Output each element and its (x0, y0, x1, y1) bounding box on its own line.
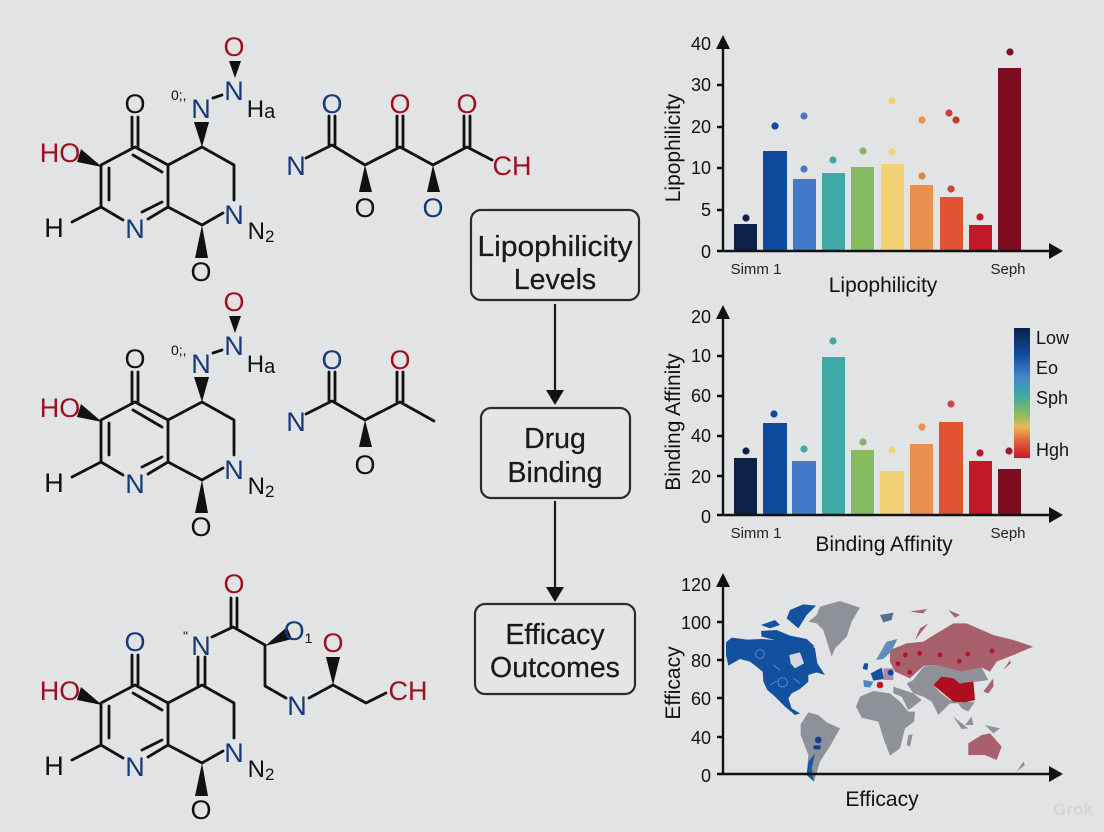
axis title: x: Efficacy (845, 788, 919, 811)
side chain: O (321, 345, 343, 375)
world map (726, 601, 1033, 782)
axes: 60 (691, 689, 711, 709)
axes: 10 (691, 346, 711, 366)
ring system: O (190, 257, 212, 287)
south america (801, 712, 840, 782)
side chain: N (286, 407, 306, 437)
europe (863, 639, 897, 688)
axes: 5 (701, 200, 711, 220)
axes: 0 (701, 507, 711, 527)
flow box: Drug Binding: Binding (507, 457, 603, 489)
side chain: O (322, 628, 344, 658)
axes: 40 (691, 426, 711, 446)
ring system: 0;, (171, 87, 187, 103)
north america (726, 604, 825, 715)
axis title: y: Lipophilicity (662, 93, 685, 202)
legend: colour scale: Hgh (1036, 440, 1069, 460)
axes: 40 (691, 728, 711, 748)
side chain: CH (388, 676, 428, 706)
molecule 1 (40, 32, 532, 287)
side chain: N (191, 631, 211, 661)
islands (880, 609, 1025, 772)
side chain: O (389, 345, 411, 375)
bar chart: lipophilicity (662, 34, 1063, 297)
axes (691, 305, 1063, 527)
arabia (893, 687, 922, 710)
side chain: N (287, 691, 307, 721)
ring system: O (124, 89, 146, 119)
axes: 20 (691, 307, 711, 327)
axes: 0 (701, 242, 711, 262)
russia (890, 623, 1033, 678)
data points (742, 337, 1013, 457)
ring system: 2 (265, 482, 274, 501)
side chain: O (284, 616, 305, 646)
ring system: 2 (265, 227, 274, 246)
side chain (286, 345, 434, 480)
ring system: H (44, 751, 64, 781)
side chain: " (183, 628, 188, 644)
flow box: Efficacy Outcomes (475, 604, 635, 694)
axis title: x: Lipophilicity (829, 274, 938, 297)
arrow: levels to binding (546, 304, 564, 405)
molecule 2 (40, 287, 434, 542)
ring system: H (44, 468, 64, 498)
axis title: y: Binding Affinity (662, 353, 685, 491)
flow box: Efficacy Outcomes: Efficacy (505, 619, 605, 651)
ring system: N (191, 94, 211, 124)
axes (691, 34, 1063, 262)
ring system: N (125, 752, 145, 782)
flow box: Efficacy Outcomes: Outcomes (490, 652, 620, 684)
flow box: Drug Binding: Drug (524, 423, 586, 455)
axes (681, 573, 1063, 786)
bar chart: binding affinity (662, 305, 1070, 556)
ring system: O (223, 287, 245, 317)
ring system: O (190, 795, 212, 825)
ring system (40, 287, 276, 542)
ring system: N (125, 214, 145, 244)
axes: 40 (691, 34, 711, 54)
ring system: H (44, 213, 64, 243)
china (933, 677, 975, 702)
axes: 10 (691, 158, 711, 178)
side chain: O (321, 89, 343, 119)
legend: colour scale (1014, 328, 1070, 460)
arrow: binding to efficacy (546, 501, 564, 602)
ring system: N (224, 455, 244, 485)
flow box: Lipophilicity Levels: Lipophilicity (478, 231, 633, 263)
bars (734, 68, 1021, 251)
ring system: 0;, (171, 342, 187, 358)
category labels (731, 525, 1026, 542)
axes: 20 (691, 467, 711, 487)
axes: 20 (691, 117, 711, 137)
legend: colour scale: Sph (1036, 388, 1068, 408)
ring system: O (223, 32, 245, 62)
side chain: O (354, 450, 376, 480)
ring system: N (125, 469, 145, 499)
legend: colour scale: Eo (1036, 358, 1058, 378)
axes: 0 (701, 766, 711, 786)
axes: 120 (681, 575, 711, 595)
ring system: HO (40, 138, 80, 168)
africa (856, 691, 915, 756)
axis title: y: Efficacy (662, 646, 685, 720)
central and south asia (907, 665, 988, 715)
axis title: x: Binding Affinity (815, 533, 953, 556)
flow box: Lipophilicity Levels: Levels (514, 264, 596, 296)
ring system: N (224, 76, 244, 106)
watermark: Grok (1053, 800, 1093, 819)
axes: 30 (691, 75, 711, 95)
map chart: efficacy (662, 573, 1063, 811)
ring system: O (124, 344, 146, 374)
side chain: O (389, 89, 411, 119)
ring system: N (248, 218, 265, 245)
ring system: N (224, 200, 244, 230)
ring system: O (124, 627, 146, 657)
data points (742, 48, 1014, 222)
ring system (40, 32, 276, 287)
ring system: N (224, 331, 244, 361)
axes: 80 (691, 651, 711, 671)
side chain: N (286, 151, 306, 181)
molecule 3 (40, 569, 428, 825)
flow box: Drug Binding (481, 408, 630, 498)
ring system: HO (40, 676, 80, 706)
ring system: 2 (265, 765, 274, 784)
ring system: N (248, 756, 265, 783)
ring system: a (264, 101, 276, 123)
ring system: N (191, 349, 211, 379)
side chain: 1 (305, 630, 313, 646)
side chain (183, 569, 428, 721)
category labels: Simm 1 (731, 261, 781, 278)
side chain: CH (492, 151, 532, 181)
ring system: HO (40, 393, 80, 423)
side chain: O (223, 569, 245, 599)
axes: 100 (681, 613, 711, 633)
side chain: O (456, 89, 478, 119)
ring system (40, 627, 274, 825)
category labels: Simm 1 (731, 525, 781, 542)
category labels: Seph (990, 261, 1026, 278)
ring system: O (190, 512, 212, 542)
ring system: H (247, 351, 264, 378)
bars (734, 357, 1021, 515)
side chain (286, 89, 532, 223)
axes: 60 (691, 386, 711, 406)
ring system: a (264, 356, 276, 378)
legend: colour scale: Low (1036, 328, 1070, 348)
ring system: H (247, 96, 264, 123)
side chain: O (354, 193, 376, 223)
data points on russia (896, 649, 994, 675)
greenland (808, 601, 860, 657)
ring system: N (224, 738, 244, 768)
australia (968, 733, 1002, 760)
ring system: N (248, 473, 265, 500)
category labels: Seph (990, 525, 1026, 542)
side chain: O (422, 193, 444, 223)
flow box: Lipophilicity Levels (471, 210, 639, 300)
category labels (731, 261, 1026, 278)
